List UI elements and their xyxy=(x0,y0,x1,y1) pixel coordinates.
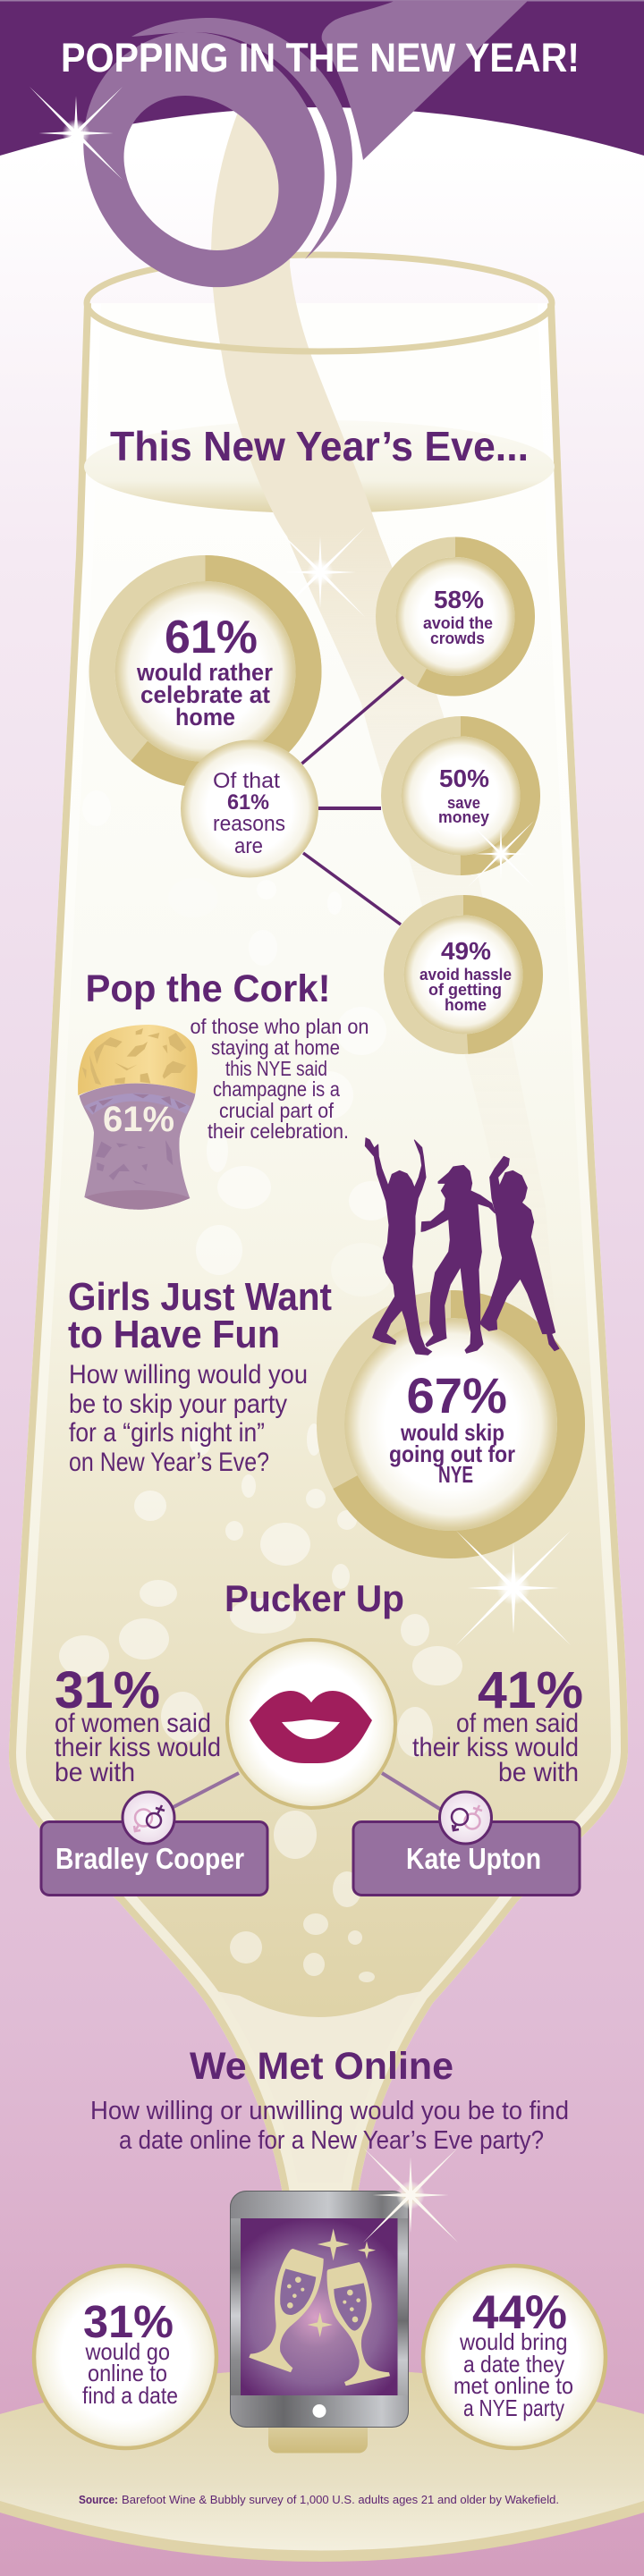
circle: 31 percent go online: 31% xyxy=(83,2296,174,2347)
icon: clinking glasses xyxy=(249,2228,390,2386)
text block: online date question: How willing or unwilling would you be to find xyxy=(90,2097,569,2125)
stat: women 31 percent: their kiss would xyxy=(55,1733,221,1762)
tablet stand xyxy=(268,2414,368,2454)
donut: 61 percent: 61% xyxy=(165,612,258,663)
circle: of that 61 percent: are xyxy=(234,834,263,858)
circle: 44 percent bring a date: would bring xyxy=(459,2328,567,2355)
stat: men 41 percent: 41% xyxy=(478,1661,583,1719)
heading: pop the cork: Pop the Cork! xyxy=(86,967,331,1010)
stat: women 31 percent: of women said xyxy=(55,1709,211,1738)
donut: 50 percent: 50% xyxy=(439,764,489,792)
text block: cork stat: of those who plan on xyxy=(190,1015,369,1038)
donut: 67 percent xyxy=(331,1304,571,1545)
sparkle: on 50 percent donut xyxy=(468,821,534,887)
liquid surface xyxy=(84,420,555,513)
icon: tablet xyxy=(230,2191,409,2428)
text block: cork stat: staying at home xyxy=(211,1035,340,1059)
source note: Barefoot Wine & Bubbly survey of 1,000 U.S. adults ages 21 and older by Wakefield. xyxy=(122,2493,559,2506)
top purple banner xyxy=(0,0,644,156)
circle: 44 percent bring a date: a NYE party xyxy=(463,2394,564,2421)
heading: we met online: We Met Online xyxy=(190,2045,453,2088)
text block: girls night question: on New Year’s Eve? xyxy=(69,1448,269,1477)
donut: 67 percent: 67% xyxy=(406,1367,507,1423)
sparkle: behind donuts xyxy=(275,528,365,617)
sparkle: top left xyxy=(30,87,123,180)
stat: men 41 percent: their kiss would xyxy=(412,1733,579,1762)
title: POPPING IN THE NEW YEAR! xyxy=(61,35,580,80)
donut: 50 percent: money xyxy=(438,808,489,826)
donut: 49 percent: home xyxy=(445,996,487,1014)
icon: gender symbols right xyxy=(440,1792,492,1844)
donut: 67 percent: NYE xyxy=(438,1461,473,1488)
donut: 58 percent: 58% xyxy=(434,586,484,613)
text block: online date question xyxy=(90,2097,569,2155)
tablet screen xyxy=(241,2218,397,2395)
bottle neck xyxy=(322,1,528,160)
circle: lips xyxy=(227,1640,395,1808)
circle: of that 61 percent: reasons xyxy=(213,812,285,836)
donut: 67 percent: going out for xyxy=(389,1440,515,1467)
text block: online date question: a date online for a New Year’s Eve party? xyxy=(119,2126,544,2155)
donut: 49 percent xyxy=(394,905,533,1044)
cork label: 61% xyxy=(103,1100,174,1139)
ring crescent xyxy=(131,18,352,259)
connector lines to name boxes xyxy=(170,1773,445,1812)
stat: men 41 percent: be with xyxy=(498,1758,579,1787)
circle: 31 percent go online: find a date xyxy=(82,2382,178,2409)
stat: women 31 percent xyxy=(55,1661,221,1787)
home button xyxy=(313,2404,326,2418)
donut: 49 percent: avoid hassle xyxy=(419,966,512,984)
donut: 67 percent: would skip xyxy=(400,1419,504,1446)
donut: 58 percent: crowds xyxy=(430,629,485,647)
circle: 44 percent bring a date: a date they xyxy=(463,2351,564,2378)
circle: 44 percent bring a date xyxy=(423,2266,606,2448)
text block: cork stat: their celebration. xyxy=(208,1119,349,1143)
glass bowl and stem xyxy=(0,303,644,2208)
donut: 61 percent: home xyxy=(175,704,235,731)
circle: 31 percent go online: online to xyxy=(88,2360,167,2386)
name box: kate upton: Kate Upton xyxy=(406,1842,541,1875)
source note: Source: xyxy=(79,2493,118,2506)
stat: women 31 percent: 31% xyxy=(55,1661,160,1719)
text block: cork stat: champagne is a xyxy=(213,1077,340,1101)
text block: cork stat xyxy=(190,1015,369,1143)
name box: kate upton xyxy=(353,1822,580,1896)
stat: men 41 percent xyxy=(412,1661,583,1787)
icon: cork xyxy=(78,1025,198,1210)
text block: girls night question xyxy=(69,1360,308,1477)
donut: 61 percent xyxy=(102,569,309,774)
circle: 31 percent go online xyxy=(34,2266,216,2448)
glass rim xyxy=(87,255,552,351)
circle: 44 percent bring a date: met online to xyxy=(453,2372,573,2399)
text block: cork stat: this NYE said xyxy=(225,1057,327,1080)
circle: 31 percent go online: would go xyxy=(85,2338,170,2365)
donut: 50 percent xyxy=(391,726,530,866)
donut: 58 percent: avoid the xyxy=(423,614,493,632)
donut: 58 percent xyxy=(386,547,525,686)
name box: bradley cooper xyxy=(41,1822,267,1896)
name box: bradley cooper: Bradley Cooper xyxy=(55,1842,244,1875)
text block: girls night question: for a “girls night in” xyxy=(69,1418,265,1448)
donut: 50 percent: save xyxy=(447,794,480,812)
circle: of that 61 percent: 61% xyxy=(227,790,269,815)
ring xyxy=(83,32,325,287)
donut: 61 percent: would rather xyxy=(136,659,273,686)
circle: of that 61 percent: Of that xyxy=(213,769,280,793)
donut: 61 percent: celebrate at xyxy=(140,681,270,708)
icon: three dancing women xyxy=(365,1138,559,1355)
heading: girls just want to have fun: Girls Just Want xyxy=(68,1275,332,1319)
donut: 49 percent: of getting xyxy=(428,981,502,999)
heading: girls just want to have fun xyxy=(68,1275,332,1356)
stat: men 41 percent: of men said xyxy=(456,1709,579,1738)
text block: girls night question: be to skip your party xyxy=(69,1389,287,1419)
sparkle: pucker up xyxy=(456,1531,571,1645)
donut: 49 percent: 49% xyxy=(441,937,491,965)
heading: this new year's eve: This New Year’s Eve... xyxy=(110,423,529,469)
text block: cork stat: crucial part of xyxy=(219,1099,335,1122)
icon: gender symbols left xyxy=(123,1792,174,1844)
icon: lips xyxy=(250,1691,372,1763)
circle: 44 percent bring a date: 44% xyxy=(472,2286,567,2339)
stat: women 31 percent: be with xyxy=(55,1758,135,1787)
glass foot xyxy=(0,2369,644,2562)
text block: girls night question: How willing would you xyxy=(69,1360,308,1389)
circle: of that 61 percent xyxy=(181,740,318,878)
heading: pucker up: Pucker Up xyxy=(225,1577,404,1619)
connector lines xyxy=(302,677,403,925)
heading: girls just want to have fun: to Have Fun xyxy=(68,1313,280,1356)
sparkle: tablet corner xyxy=(363,2148,458,2242)
bottle and cork wire ring xyxy=(83,1,528,287)
light top strip xyxy=(0,0,644,2)
champagne stream xyxy=(211,107,572,1520)
bubbles xyxy=(59,790,462,1982)
